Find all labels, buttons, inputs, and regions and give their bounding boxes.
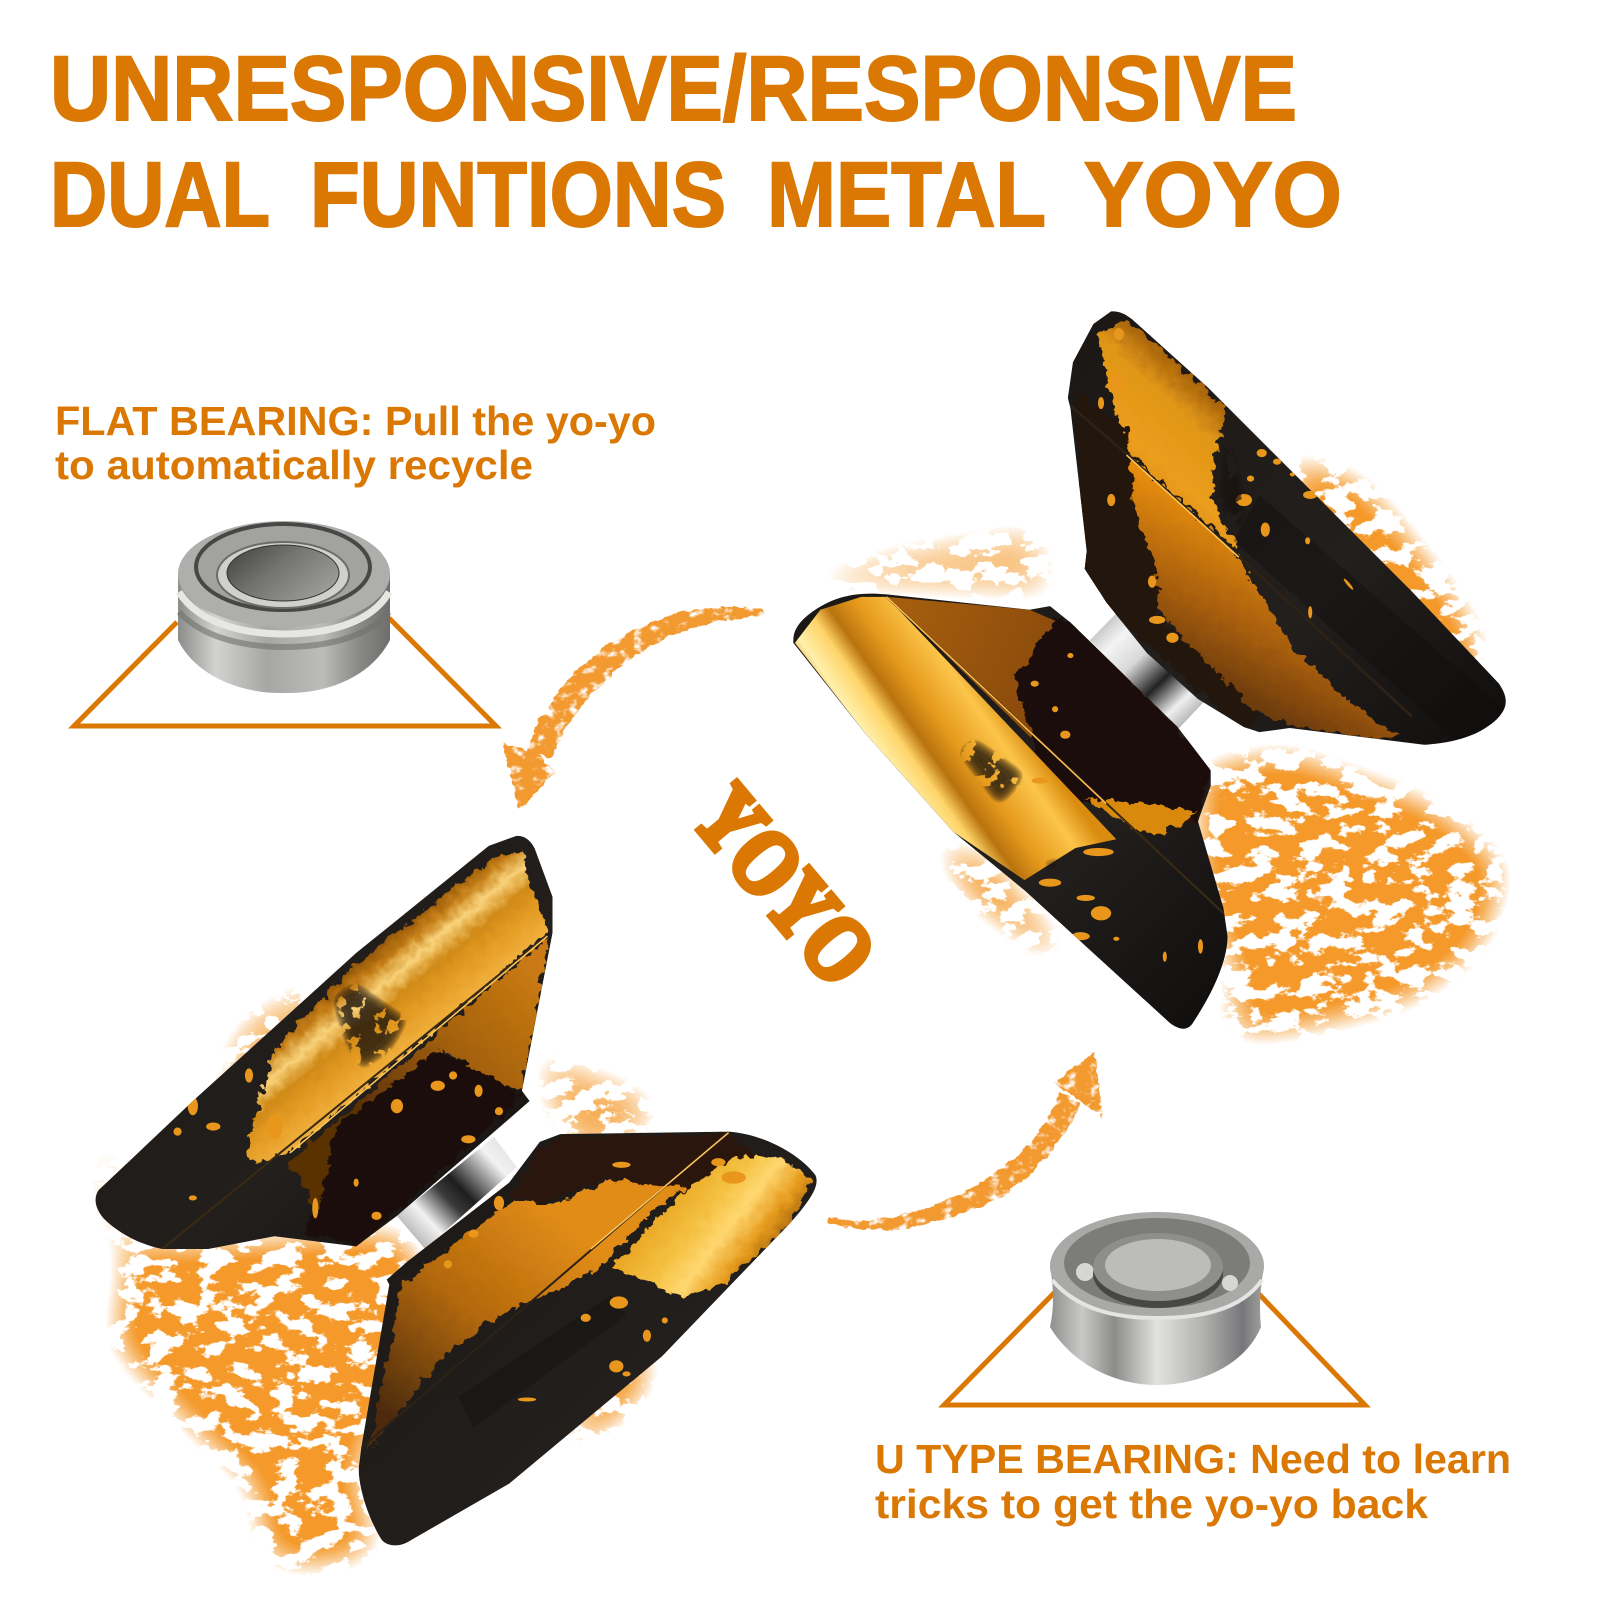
yoyo wordmark: YOYO <box>674 766 896 1004</box>
title: UNRESPONSIVE/RESPONSIVE <box>50 38 1297 140</box>
u type bearing description <box>875 1436 1511 1527</box>
title: METAL <box>767 144 1046 246</box>
paint splatter: top right yoyo <box>960 465 1246 866</box>
flat bearing description: to automatically recycle <box>55 442 533 488</box>
ink splash behind bottom-left yoyo <box>70 950 680 1590</box>
hub axle: bottom left yoyo <box>397 1137 517 1249</box>
triangle stand: u type bearing <box>944 1292 1365 1405</box>
icon: u type bearing <box>1050 1212 1264 1385</box>
title: DUAL <box>50 144 270 246</box>
icon: flat bearing <box>178 521 390 693</box>
u type bearing description: U TYPE BEARING: Need to learn <box>875 1436 1511 1482</box>
yoyo front half: bottom left <box>351 1127 826 1550</box>
u type bearing description: tricks to get the yo-yo back <box>875 1481 1428 1527</box>
flat bearing description <box>55 398 656 488</box>
u type bearing callout <box>944 1212 1365 1405</box>
yoyo: bottom left <box>91 831 826 1550</box>
curved arrow: upper left <box>503 607 763 810</box>
flat bearing callout <box>74 521 496 726</box>
flat bearing description: FLAT BEARING: Pull the yo-yo <box>55 398 656 444</box>
triangle stand: flat bearing <box>74 618 496 726</box>
title <box>50 38 1342 246</box>
yoyo back half: bottom left <box>91 831 560 1254</box>
title: FUNTIONS <box>310 144 726 246</box>
paint splatter: bottom left yoyo <box>333 858 526 1068</box>
hub axle: top right yoyo <box>1090 613 1207 729</box>
title: YOYO <box>1084 144 1342 246</box>
ink splash behind top-right yoyo <box>770 280 1530 1060</box>
yoyo front half: top right <box>790 587 1234 1036</box>
yoyo back half: top right <box>1055 301 1514 760</box>
yoyo: top right <box>790 301 1514 1036</box>
curved arrow: lower right <box>828 1050 1102 1230</box>
